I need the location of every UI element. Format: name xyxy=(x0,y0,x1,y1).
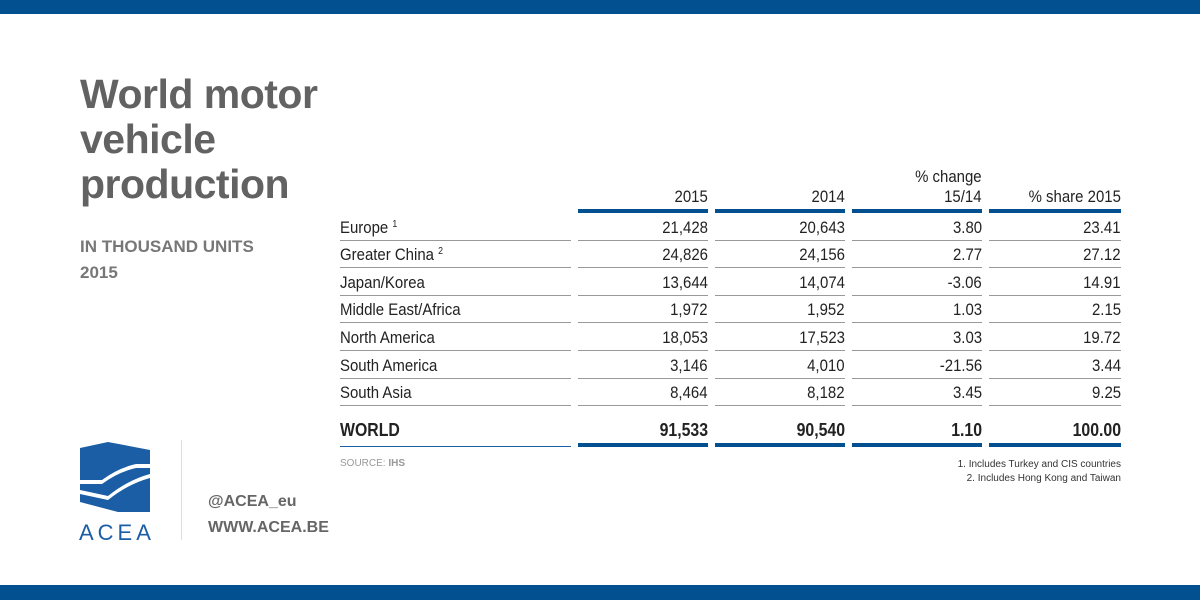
table: 1,952 xyxy=(808,300,845,319)
footnotes: 2. Includes Hong Kong and Taiwan xyxy=(967,473,1121,484)
table: Japan/Korea xyxy=(340,273,425,292)
table: 3.03 xyxy=(953,328,982,347)
table: % change xyxy=(915,167,982,186)
rows: 23.41 xyxy=(1084,218,1121,237)
table: 1,972 xyxy=(671,300,708,319)
world row: 91,533 xyxy=(660,420,708,440)
table: 3.44 xyxy=(1092,356,1121,375)
contact text: @ACEA_eu xyxy=(208,493,297,510)
table: 2.15 xyxy=(1092,300,1121,319)
rows: 3.80 xyxy=(953,218,982,237)
table: South America xyxy=(340,356,437,375)
table: 1.03 xyxy=(953,300,982,319)
table: 27.12 xyxy=(1084,245,1121,264)
rows: Europe 1 xyxy=(340,218,397,237)
table: 3,146 xyxy=(671,356,708,375)
table: 2014 xyxy=(812,187,845,206)
table: Middle East/Africa xyxy=(340,300,461,319)
title xyxy=(80,71,318,207)
footnotes: 1. Includes Turkey and CIS countries xyxy=(958,459,1121,470)
table: -3.06 xyxy=(948,273,982,292)
table: 8,464 xyxy=(671,383,708,402)
title: production xyxy=(80,161,289,207)
table: 2.77 xyxy=(953,245,982,264)
table: % share 2015 xyxy=(1029,187,1121,206)
subtitle: 2015 xyxy=(80,263,118,282)
table: 13,644 xyxy=(662,273,708,292)
table: 24,826 xyxy=(662,245,708,264)
top bar xyxy=(0,0,1200,14)
table: 14,074 xyxy=(799,273,845,292)
divider xyxy=(181,440,182,540)
subtitle: IN THOUSAND UNITS xyxy=(80,237,254,256)
world row: 1.10 xyxy=(951,420,982,440)
table: 3.45 xyxy=(953,383,982,402)
title: World motor xyxy=(80,71,317,117)
table: South Asia xyxy=(340,383,412,402)
table: 4,010 xyxy=(808,356,845,375)
world row: 90,540 xyxy=(797,420,845,440)
world row xyxy=(340,420,1121,447)
table: 18,053 xyxy=(662,328,708,347)
table: -21.56 xyxy=(940,356,982,375)
table: 15/14 xyxy=(945,187,982,206)
table: 9.25 xyxy=(1092,383,1121,402)
table: 17,523 xyxy=(799,328,845,347)
source: SOURCE: IHS xyxy=(340,458,405,469)
contact text xyxy=(208,493,329,536)
footnotes xyxy=(958,459,1121,484)
table: 8,182 xyxy=(808,383,845,402)
table: 19.72 xyxy=(1084,328,1121,347)
table: North America xyxy=(340,328,435,347)
table: 14.91 xyxy=(1084,273,1121,292)
rows xyxy=(340,218,1121,241)
world row: WORLD xyxy=(340,420,400,440)
rows: 21,428 xyxy=(662,218,708,237)
rows: 20,643 xyxy=(799,218,845,237)
subtitle xyxy=(80,237,254,282)
contact text: WWW.ACEA.BE xyxy=(208,519,329,536)
bottom bar xyxy=(0,585,1200,600)
title: vehicle xyxy=(80,116,216,162)
table: Greater China 2 xyxy=(340,245,443,264)
logo: ACEA xyxy=(79,442,155,542)
table header: 2015 xyxy=(675,187,708,206)
table: 24,156 xyxy=(799,245,845,264)
world row: 100.00 xyxy=(1073,420,1121,440)
